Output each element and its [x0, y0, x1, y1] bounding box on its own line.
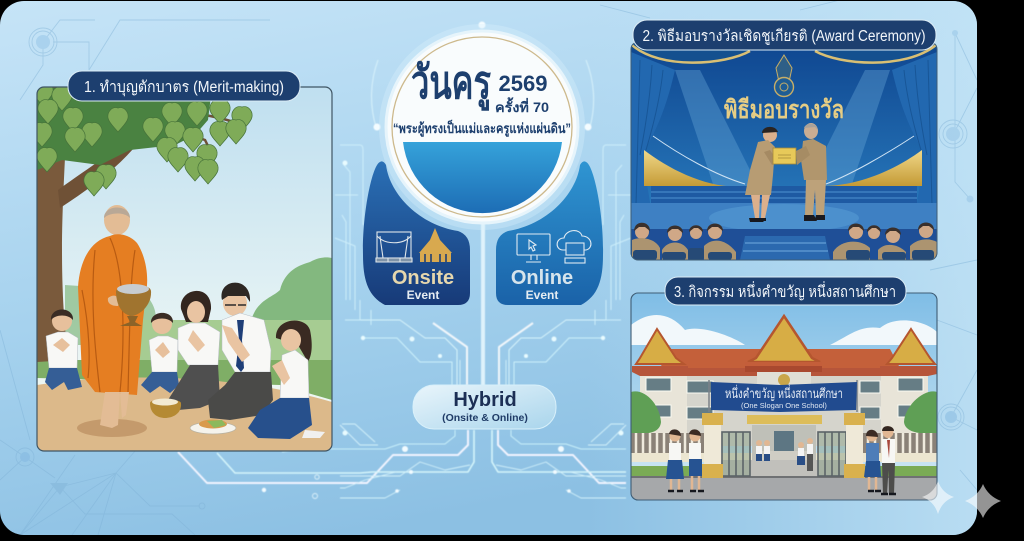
stage steps [651, 186, 917, 203]
icon: cloud computer [557, 231, 591, 263]
hybrid sublabel: (Onsite & Online) [442, 412, 528, 424]
woman teacher [168, 291, 220, 410]
gables [636, 316, 935, 392]
panel: school slogan illustration [631, 293, 937, 500]
entry building [752, 425, 816, 460]
stage heading text: พิธีมอบรางวัล [724, 96, 844, 124]
tree [32, 82, 252, 362]
gold side sweeps [644, 150, 726, 186]
title: wan khru: วันครู [411, 56, 491, 111]
grass [37, 360, 332, 400]
central circle badge [379, 24, 585, 230]
year: 2569 [499, 71, 547, 96]
road [631, 478, 937, 500]
distant trees [65, 257, 332, 360]
emblem [774, 55, 794, 96]
trees [631, 391, 937, 434]
blue lower segment [403, 142, 562, 213]
label: online: Online [511, 267, 573, 289]
banner: หนึ่งคำขวัญ หนึ่งสถานศึกษา [725, 385, 843, 401]
sparkle marks [922, 481, 1001, 518]
girl student [248, 321, 325, 439]
school walls [640, 376, 928, 433]
clouds [631, 315, 937, 345]
woman presenter [745, 127, 778, 222]
label: onsite event: Event [407, 288, 439, 302]
edition: ครั้งที่ 70 [495, 97, 549, 115]
panel: merit-making illustration [32, 82, 332, 451]
panel 3 border [631, 293, 937, 500]
hybrid pill [413, 385, 556, 429]
left curtain [631, 52, 675, 210]
right curtain [892, 52, 937, 210]
audience [632, 222, 937, 260]
heading: award ceremony: 2. พิธีมอบรางวัลเชิดชูเกียรติ (Award Ceremony) [642, 28, 926, 46]
panel 2 border [631, 42, 937, 260]
label: onsite: Onsite [392, 267, 454, 289]
gates [722, 432, 846, 476]
teacher and student right [864, 426, 896, 494]
icon: temple [419, 228, 452, 262]
heading: award ceremony [633, 20, 936, 50]
fence [631, 433, 937, 477]
man teacher [208, 283, 273, 420]
panel: award ceremony illustration [631, 42, 937, 260]
students left [666, 429, 704, 491]
gate pillars [702, 413, 865, 478]
hybrid label: Hybrid [453, 389, 517, 411]
ground [37, 378, 332, 451]
students distant [756, 438, 813, 471]
top valance [632, 44, 936, 48]
icon: theatre stage [376, 232, 412, 262]
food offerings [150, 398, 236, 434]
spotlights [675, 70, 890, 190]
panel 1 border [37, 87, 332, 451]
heading: one slogan one school [665, 277, 906, 305]
icon: monitor [517, 234, 550, 262]
man presenter [796, 123, 827, 221]
monk [78, 205, 151, 428]
online card [496, 161, 603, 305]
label: online event: Event [526, 288, 558, 302]
circuit lines [178, 22, 631, 498]
school roof [660, 349, 900, 368]
banner: (One Slogan One School) [741, 401, 827, 410]
certificate [773, 148, 796, 164]
onsite card [363, 161, 470, 305]
heading: merit-making: 1. ทำบุญตักบาตร (Merit-making) [84, 79, 284, 97]
left boy [45, 310, 82, 390]
theme quote: “พระผู้ทรงเป็นแม่และครูแห่งแผ่นดิน” [393, 119, 571, 137]
heading: merit-making [68, 71, 300, 101]
heading: one slogan one school: 3. กิจกรรม หนึ่งคำขวัญ หนึ่งสถานศึกษา [674, 281, 896, 301]
middle boy [141, 313, 179, 393]
banner [709, 380, 857, 412]
